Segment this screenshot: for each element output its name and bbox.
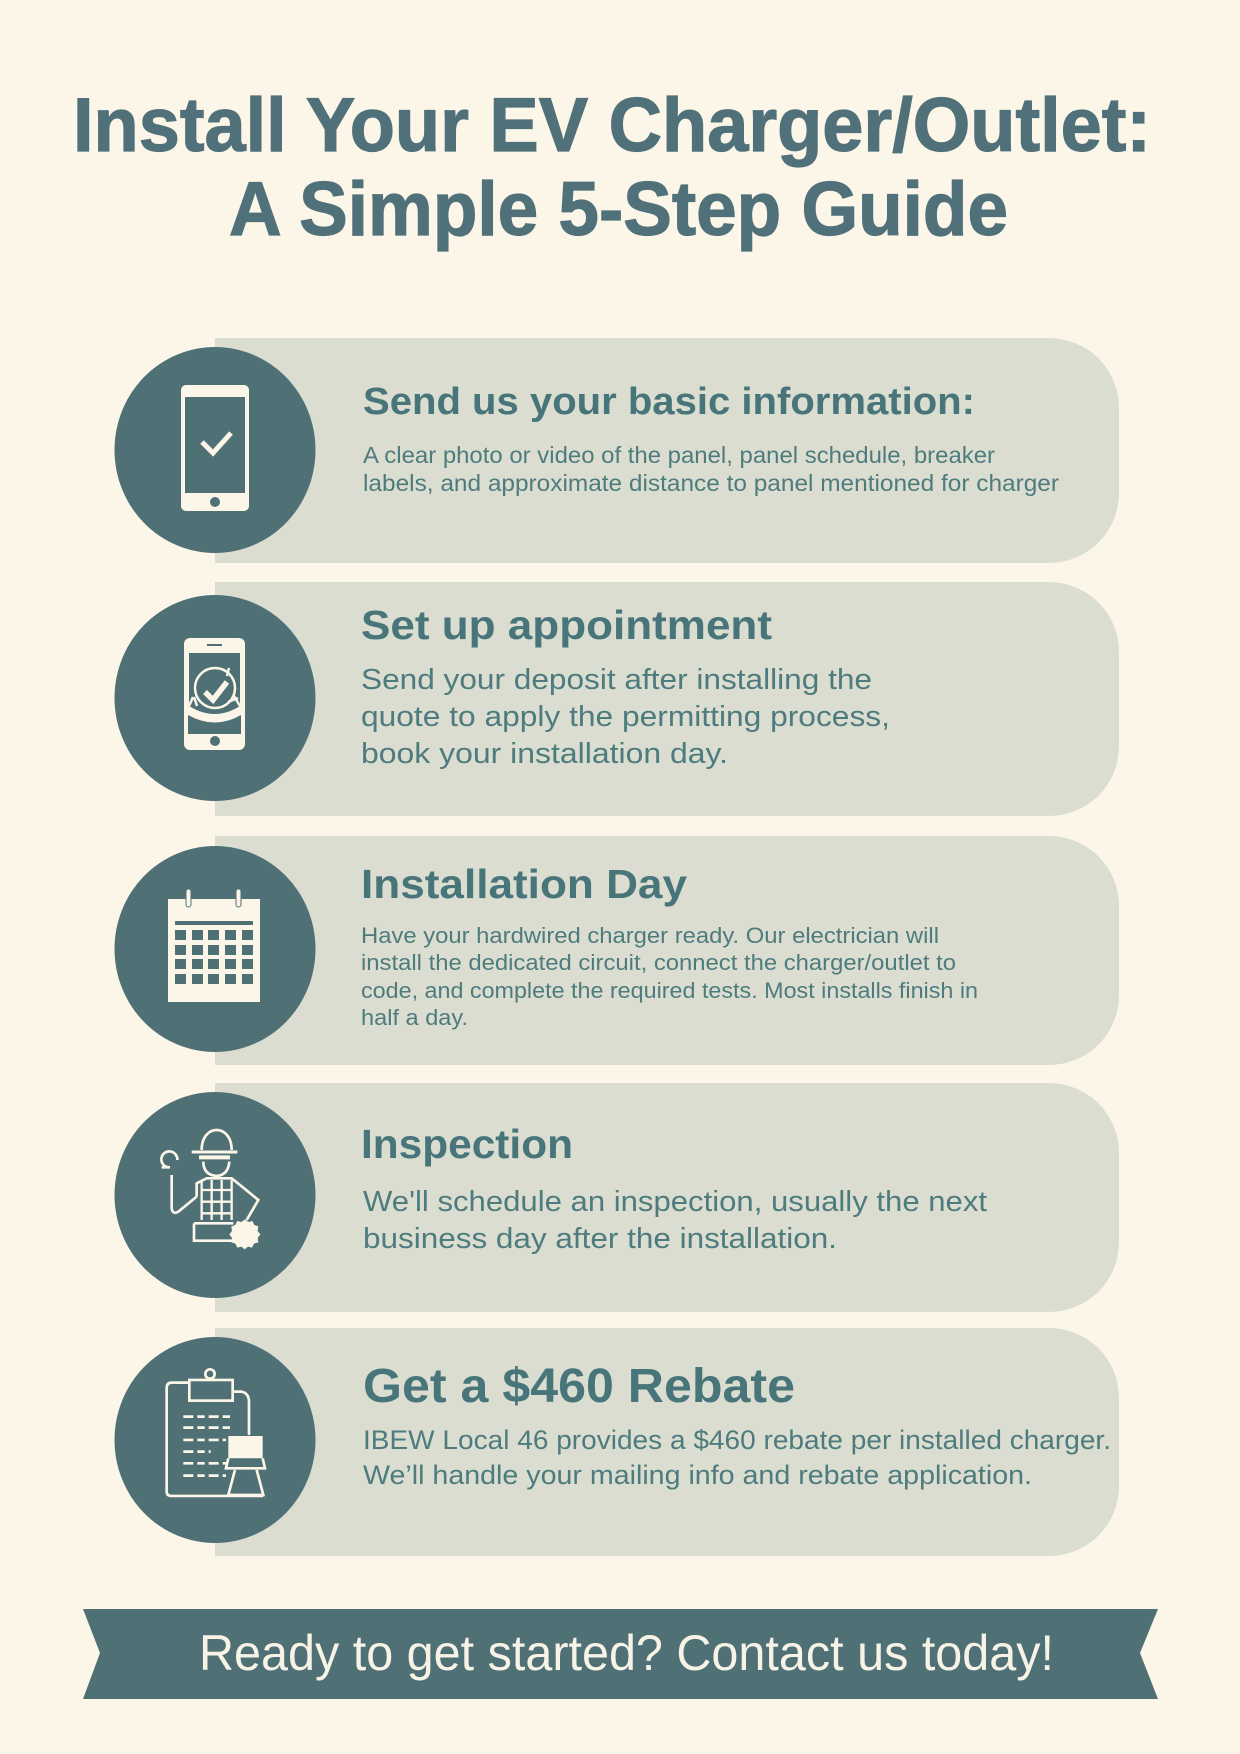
text: step 3 description [361,923,978,1030]
text: step 5 description: We’ll handle your mailing info and rebate application. [363,1460,1032,1490]
icon: clipboard and rebate form [114,1337,316,1543]
text: step 2 description [361,664,890,770]
icon: phone with check [114,347,316,553]
text: step 1 description: labels, and approximate distance to panel mentioned for charger [363,470,1059,496]
icon: calendar [114,846,316,1052]
heading: step 5: Get a $460 Rebate [363,1360,795,1413]
panel: step 2 [114,582,1119,816]
panel: step 3 [114,836,1119,1065]
text: step 5 description [363,1425,1111,1490]
title: Install Your EV Charger/Outlet: [73,83,1151,168]
text: step 2 description: book your installation day. [361,738,728,770]
banner: call to action [83,1609,1158,1699]
text: step 1 description: A clear photo or video of the panel, panel schedule, breaker [363,442,995,468]
panel: step 4 [114,1083,1119,1312]
icon: electrician inspector [114,1092,316,1298]
text: step 3 description: code, and complete the required tests. Most installs finish in [361,978,978,1003]
text: step 5 description: IBEW Local 46 provides a $460 rebate per installed charger. [363,1425,1111,1455]
heading: step 3: Installation Day [361,861,687,907]
icon: phone with appointment check [114,595,316,801]
text: step 2 description: quote to apply the permitting process, [361,701,890,733]
text: step 3 description: install the dedicated circuit, connect the charger/outlet to [361,950,956,975]
text: step 3 description: half a day. [361,1005,468,1030]
heading: step 2: Set up appointment [361,602,772,648]
text: step 3 description: Have your hardwired charger ready. Our electrician will [361,923,939,948]
text: step 1 description [363,442,1059,496]
text: step 2 description: Send your deposit after installing the [361,664,872,696]
banner: call to action: Ready to get started? Contact us today! [199,1625,1054,1681]
text: step 4 description [363,1186,987,1255]
text: step 4 description: business day after the installation. [363,1223,837,1255]
heading: step 1: Send us your basic information: [363,381,975,423]
heading: step 4: Inspection [361,1121,573,1167]
panel: step 1 [114,338,1119,563]
text: step 4 description: We'll schedule an inspection, usually the next [363,1186,987,1218]
panel: step 5 [114,1328,1119,1556]
title: A Simple 5-Step Guide [229,167,1008,252]
title [73,83,1151,252]
